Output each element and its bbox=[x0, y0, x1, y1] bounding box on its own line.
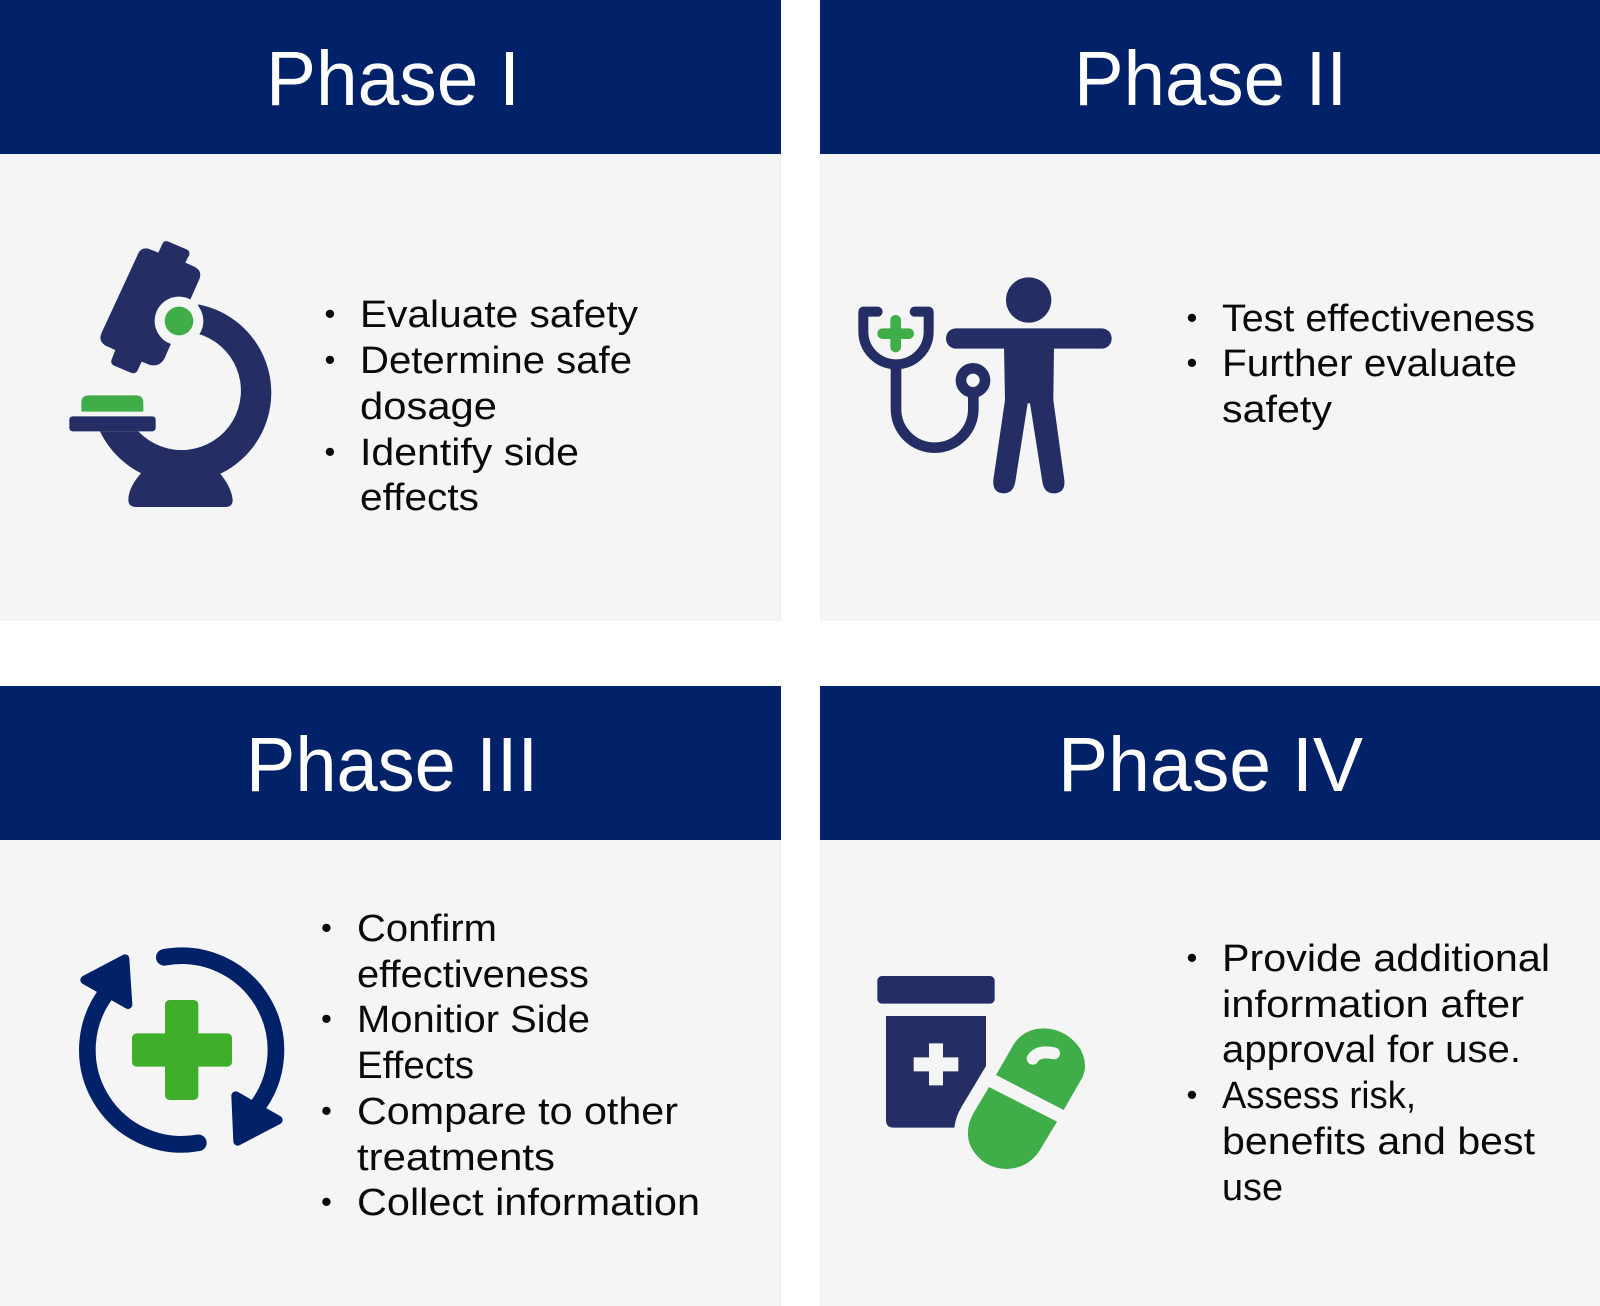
bullet list: Phase I: Determine safe bbox=[360, 340, 632, 382]
bullet list: Phase I: • bbox=[324, 434, 335, 469]
bullet list: Phase III: effectiveness bbox=[357, 954, 589, 996]
header: Phase IV: Phase IV bbox=[1058, 722, 1364, 808]
bullet list: Phase I: Identify side bbox=[360, 432, 579, 474]
header: Phase I bbox=[0, 0, 781, 154]
bullet list: Phase I: Evaluate safety bbox=[360, 294, 638, 336]
bullet list: Phase III: Effects bbox=[357, 1045, 474, 1087]
bullet list: Phase II: Test effectiveness bbox=[1222, 298, 1535, 340]
bullet list: Phase II bbox=[1186, 298, 1535, 431]
header: Phase III: Phase III bbox=[246, 722, 538, 808]
panel: Phase III bbox=[0, 686, 781, 1306]
bullet list: Phase III: Monitior Side bbox=[357, 999, 590, 1041]
bullet list: Phase I: dosage bbox=[360, 386, 497, 428]
bullet list: Phase II: • bbox=[1186, 345, 1197, 380]
icon: microscope bbox=[69, 241, 271, 507]
icon: cycle arrows with cross bbox=[85, 956, 278, 1144]
icon: medicine bottle and pill bbox=[877, 976, 1085, 1169]
bullet list: Phase I bbox=[324, 294, 638, 519]
bullet list: Phase I: effects bbox=[360, 477, 479, 519]
bullet list: Phase IV: • bbox=[1186, 1077, 1197, 1112]
header: Phase II: Phase II bbox=[1074, 36, 1347, 122]
bullet list: Phase IV: benefits and best bbox=[1222, 1121, 1535, 1163]
bullet list: Phase IV: use bbox=[1222, 1167, 1283, 1209]
bullet list: Phase IV: information after bbox=[1222, 984, 1524, 1026]
bullet list: Phase III: Compare to other bbox=[357, 1091, 678, 1133]
bullet list: Phase III bbox=[321, 908, 700, 1224]
icon: person with stethoscope bbox=[863, 277, 1112, 493]
panel: Phase II bbox=[820, 0, 1600, 620]
bullet list: Phase I: • bbox=[324, 296, 335, 331]
bullet list: Phase III: • bbox=[321, 910, 332, 945]
bullet list: Phase II: safety bbox=[1222, 389, 1332, 431]
bullet list: Phase II: Further evaluate bbox=[1222, 343, 1517, 385]
bullet list: Phase IV: Assess risk, bbox=[1222, 1075, 1416, 1117]
header: Phase IV bbox=[820, 686, 1600, 840]
bullet list: Phase I: • bbox=[324, 342, 335, 377]
bullet list: Phase IV: approval for use. bbox=[1222, 1029, 1521, 1071]
panel: Phase IV bbox=[820, 686, 1600, 1306]
panel: Phase I bbox=[0, 0, 781, 620]
bullet list: Phase IV: Provide additional bbox=[1222, 938, 1550, 980]
bullet list: Phase III: • bbox=[321, 1184, 332, 1219]
bullet list: Phase III: treatments bbox=[357, 1137, 555, 1179]
bullet list: Phase III: • bbox=[321, 1001, 332, 1036]
header: Phase III bbox=[0, 686, 781, 840]
bullet list: Phase IV bbox=[1186, 938, 1550, 1209]
bullet list: Phase IV: • bbox=[1186, 940, 1197, 975]
bullet list: Phase III: Collect information bbox=[357, 1182, 700, 1224]
bullet list: Phase III: • bbox=[321, 1093, 332, 1128]
header: Phase II bbox=[820, 0, 1600, 154]
bullet list: Phase II: • bbox=[1186, 300, 1197, 335]
header: Phase I: Phase I bbox=[266, 36, 520, 122]
bullet list: Phase III: Confirm bbox=[357, 908, 497, 950]
